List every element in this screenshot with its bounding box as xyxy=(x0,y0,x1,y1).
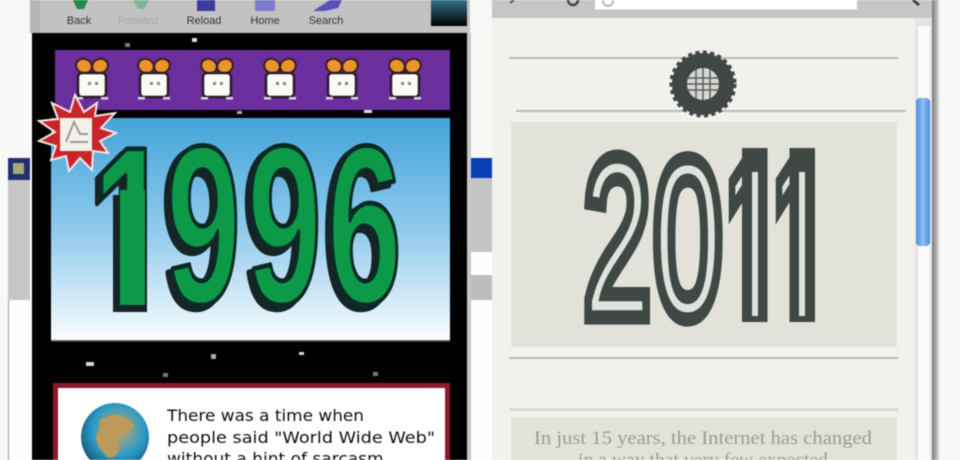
panel with 2011 xyxy=(511,122,897,347)
year 2011: 1 xyxy=(771,110,827,362)
purple banner with hamsters xyxy=(55,50,450,110)
year 1996: 6 xyxy=(322,104,397,356)
toolbar labels: Back xyxy=(67,15,92,27)
year 2011 xyxy=(583,147,816,328)
intro text panel xyxy=(511,417,897,460)
stem of the one xyxy=(113,190,147,312)
sky panel with 1996 xyxy=(50,117,451,342)
year 1996: 9 xyxy=(242,104,317,356)
box text: There was a time when xyxy=(166,406,364,425)
intro text: In just 15 years, the Internet has changed xyxy=(534,428,873,449)
right browser window 2011 xyxy=(492,0,939,460)
year 2011: 2 xyxy=(584,115,650,361)
icon: home xyxy=(255,0,275,11)
year 1996: 1 xyxy=(87,106,167,358)
year 2011: 0 xyxy=(654,118,722,361)
toolbar labels: Forward xyxy=(118,15,158,27)
box text: people said "World Wide Web" xyxy=(167,428,435,447)
icon: site xyxy=(603,0,613,6)
year 1996: 6 xyxy=(327,100,402,352)
globe seal badge xyxy=(672,52,734,116)
rule lines xyxy=(509,57,906,411)
window edge xyxy=(932,0,939,460)
year 1996: 1 xyxy=(92,101,172,353)
icon: forward xyxy=(133,0,149,9)
scrollbar xyxy=(915,18,932,460)
stems of the ones xyxy=(742,148,815,322)
intro text xyxy=(534,428,873,460)
toolbar labels: Reload xyxy=(187,15,221,27)
icon: back arrow xyxy=(510,0,514,3)
year 2011: 1 xyxy=(771,110,827,362)
year 2011: 1 xyxy=(724,110,780,362)
year 1996: 9 xyxy=(166,100,241,352)
year 2011: 0 xyxy=(654,118,722,361)
year 2011: 1 xyxy=(724,110,780,362)
icon: reload xyxy=(197,0,215,11)
icon: search xyxy=(313,0,342,11)
toolbar labels xyxy=(67,15,343,27)
icon: back xyxy=(73,0,88,9)
toolbar labels: Home xyxy=(250,15,280,27)
new burst badge xyxy=(39,95,116,171)
icon: reload xyxy=(568,0,578,5)
box text xyxy=(166,406,435,460)
icon: globe xyxy=(81,403,149,460)
year 1996 xyxy=(94,142,400,313)
intro text box xyxy=(56,386,448,460)
background window behind xyxy=(8,158,492,460)
toolbar 2011 xyxy=(492,0,938,18)
icon: wrench xyxy=(913,0,919,5)
year 2011: 2 xyxy=(584,115,650,361)
page starfield background xyxy=(32,33,471,460)
left browser window 1996 xyxy=(30,0,471,460)
corner logo xyxy=(431,0,467,26)
year 1996: 9 xyxy=(161,104,236,356)
toolbar labels: Search xyxy=(309,15,343,27)
toolbar 1996 xyxy=(30,0,470,33)
year 1996: 9 xyxy=(247,100,322,352)
